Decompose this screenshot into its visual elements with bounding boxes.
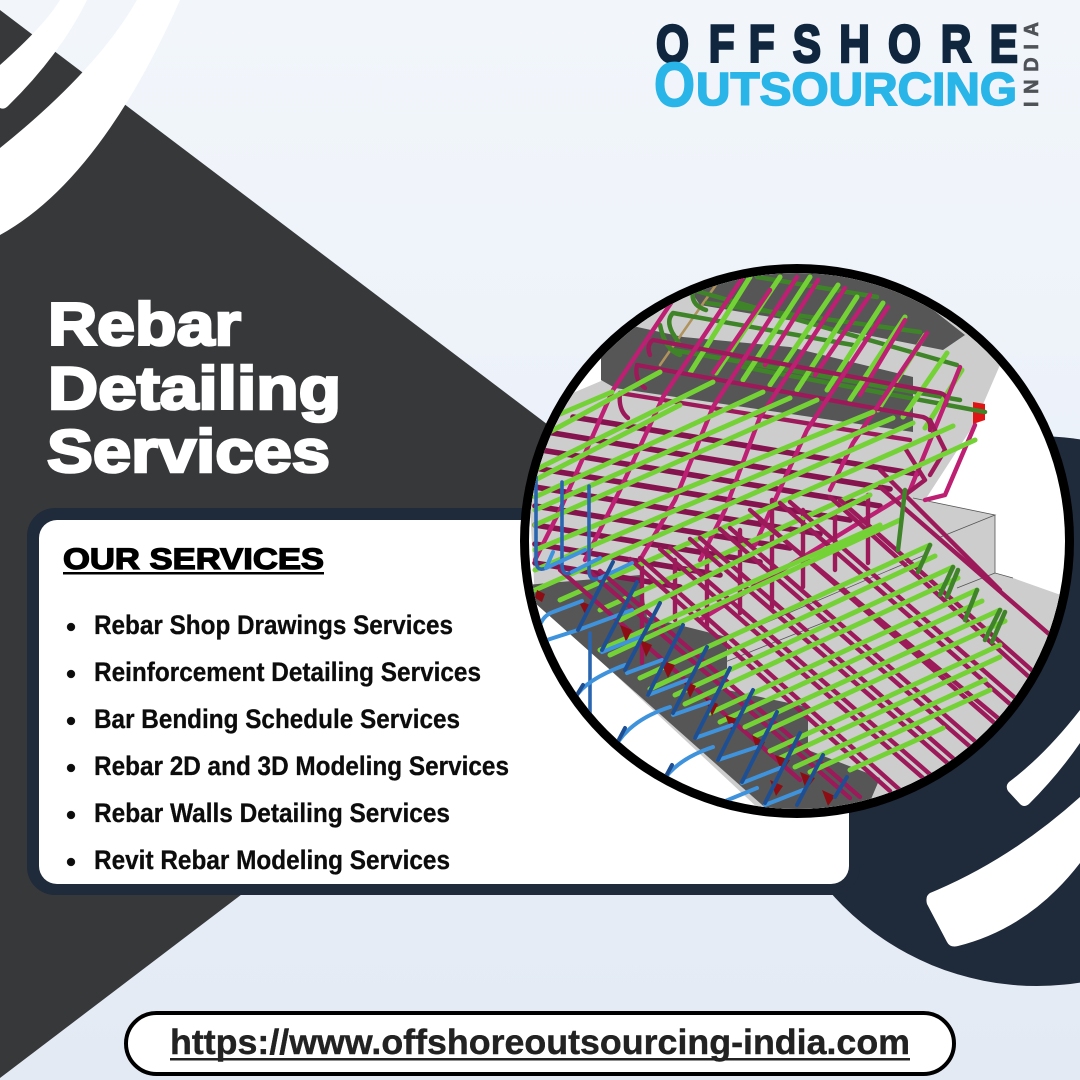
title: Services <box>47 418 330 485</box>
title: Detailing <box>48 355 341 422</box>
services list: Bar Bending Schedule Services <box>94 704 460 734</box>
services list: Rebar Shop Drawings Services <box>94 610 453 640</box>
circular photo: rebar 3D model <box>520 264 1080 825</box>
heading: our services: OUR SERVICES <box>63 543 324 576</box>
navy circle decoration with white arcs <box>762 436 1080 986</box>
website URL pill: https://www.offshoreoutsourcing-india.com <box>170 1023 910 1062</box>
logo: Offshore Outsourcing India: UTSOURCING <box>696 63 1017 115</box>
title <box>47 291 341 485</box>
services list <box>67 610 509 875</box>
services list: Rebar Walls Detailing Services <box>94 798 450 828</box>
website URL pill <box>126 1013 954 1074</box>
services list: Reinforcement Detailing Services <box>94 657 481 687</box>
logo: Offshore Outsourcing India: O <box>654 51 695 120</box>
logo: Offshore Outsourcing India: INDIA <box>1021 22 1043 107</box>
services list: Revit Rebar Modeling Services <box>94 845 450 875</box>
panel: our services card <box>27 508 860 895</box>
logo: Offshore Outsourcing India: OFFSHORE <box>656 16 1018 74</box>
dark triangle decoration with white arcs <box>0 0 704 1078</box>
services list: Rebar 2D and 3D Modeling Services <box>94 751 509 781</box>
title: Rebar <box>48 291 241 358</box>
logo: Offshore Outsourcing India <box>654 16 1043 120</box>
